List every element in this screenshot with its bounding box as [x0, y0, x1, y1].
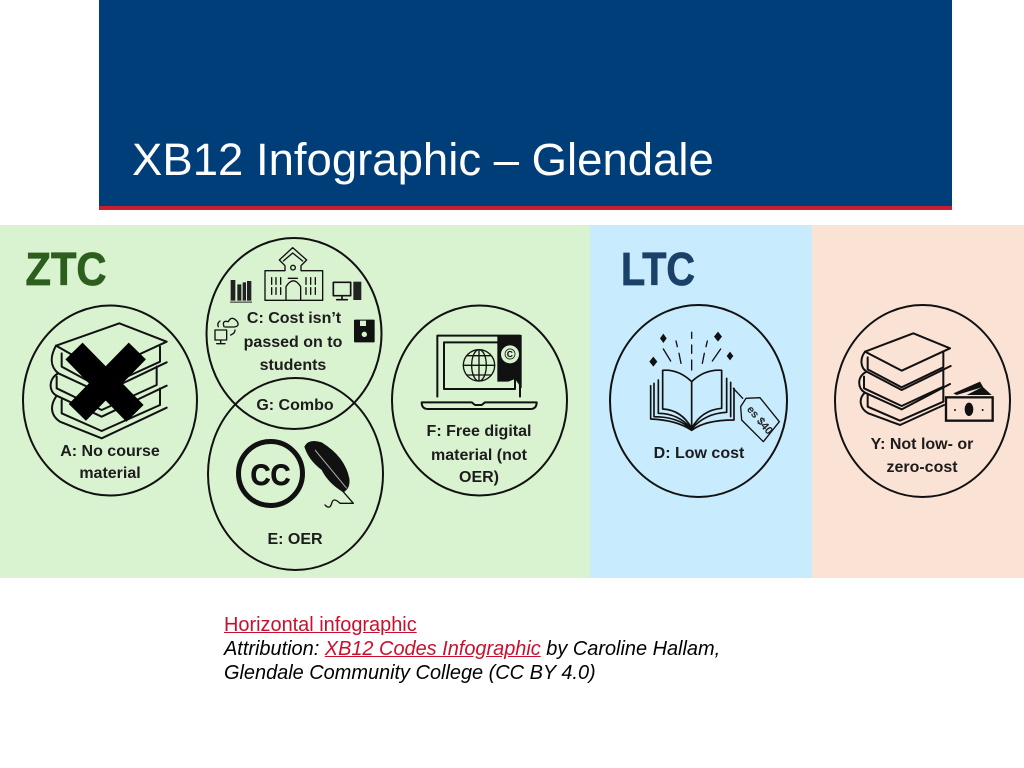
- circle A: no course material: material: [79, 465, 141, 482]
- panel: LTC background: [590, 225, 812, 578]
- icon: library books: [230, 280, 252, 303]
- label: D: D: Low cost: [654, 445, 745, 462]
- circle F: free digital material: OER): [459, 469, 499, 486]
- header banner: [99, 0, 952, 210]
- circle D: low cost: [610, 305, 787, 497]
- icon: open book with sparkles and price tag: [649, 332, 779, 442]
- panel: not low or zero cost background: [812, 225, 1024, 578]
- caption and attribution: Horizontal infographic: [224, 614, 417, 636]
- label: E: E: OER: [267, 531, 323, 548]
- label: C: C: Cost isn’t: [247, 310, 342, 327]
- circle A: no course material: [23, 306, 197, 496]
- caption and attribution: Attribution: XB12 Codes Infographic by Caroline Hallam,: [224, 638, 720, 660]
- heading: ZTC: ZTC: [26, 243, 106, 295]
- heading: LTC: LTC: [621, 243, 695, 295]
- label: G combo: G: Combo: [256, 397, 334, 414]
- circle C: cost isn't passed on to students: passed on to: [244, 334, 343, 351]
- icon: open book with sparkles and price tag: es $40: [744, 404, 775, 437]
- icon: CC logo: [238, 442, 302, 506]
- icon: floppy disk: [354, 320, 375, 342]
- icon: school building: [265, 248, 323, 300]
- icon: laptop with globe and copyright ribbon: ©: [504, 347, 516, 364]
- circle Y: not low or zero cost: zero-cost: [886, 459, 958, 476]
- header accent bar: [99, 206, 952, 210]
- caption and attribution: Glendale Community College (CC BY 4.0): [224, 662, 596, 684]
- circle C: cost isn't passed on to students: [206, 238, 382, 429]
- icon: crossed-out books: [51, 323, 167, 438]
- icon: CC logo: CC: [250, 459, 290, 492]
- label: A: A: No course: [60, 443, 160, 460]
- icon: desktop computer: [333, 282, 361, 300]
- circle Y: not low or zero cost: [835, 305, 1010, 497]
- caption and attribution: [223, 614, 720, 684]
- icon: books with banknote: [859, 333, 993, 425]
- circle C: cost isn't passed on to students: students: [260, 357, 326, 374]
- icon: cloud devices: [215, 318, 238, 344]
- infographic: XB12 codes: [0, 225, 1024, 578]
- circle F: free digital material: material (not: [431, 447, 528, 464]
- panel: ZTC background: [0, 225, 590, 578]
- icon: feather quill: [304, 441, 353, 507]
- label: F: F: Free digital: [427, 423, 531, 440]
- circle F: free digital material: [392, 306, 567, 496]
- circle E: OER: [208, 378, 383, 570]
- icon: laptop with globe and copyright ribbon: [422, 335, 537, 409]
- title: XB12 Infographic – Glendale: [132, 134, 714, 185]
- label: Y: Y: Not low- or: [871, 436, 973, 453]
